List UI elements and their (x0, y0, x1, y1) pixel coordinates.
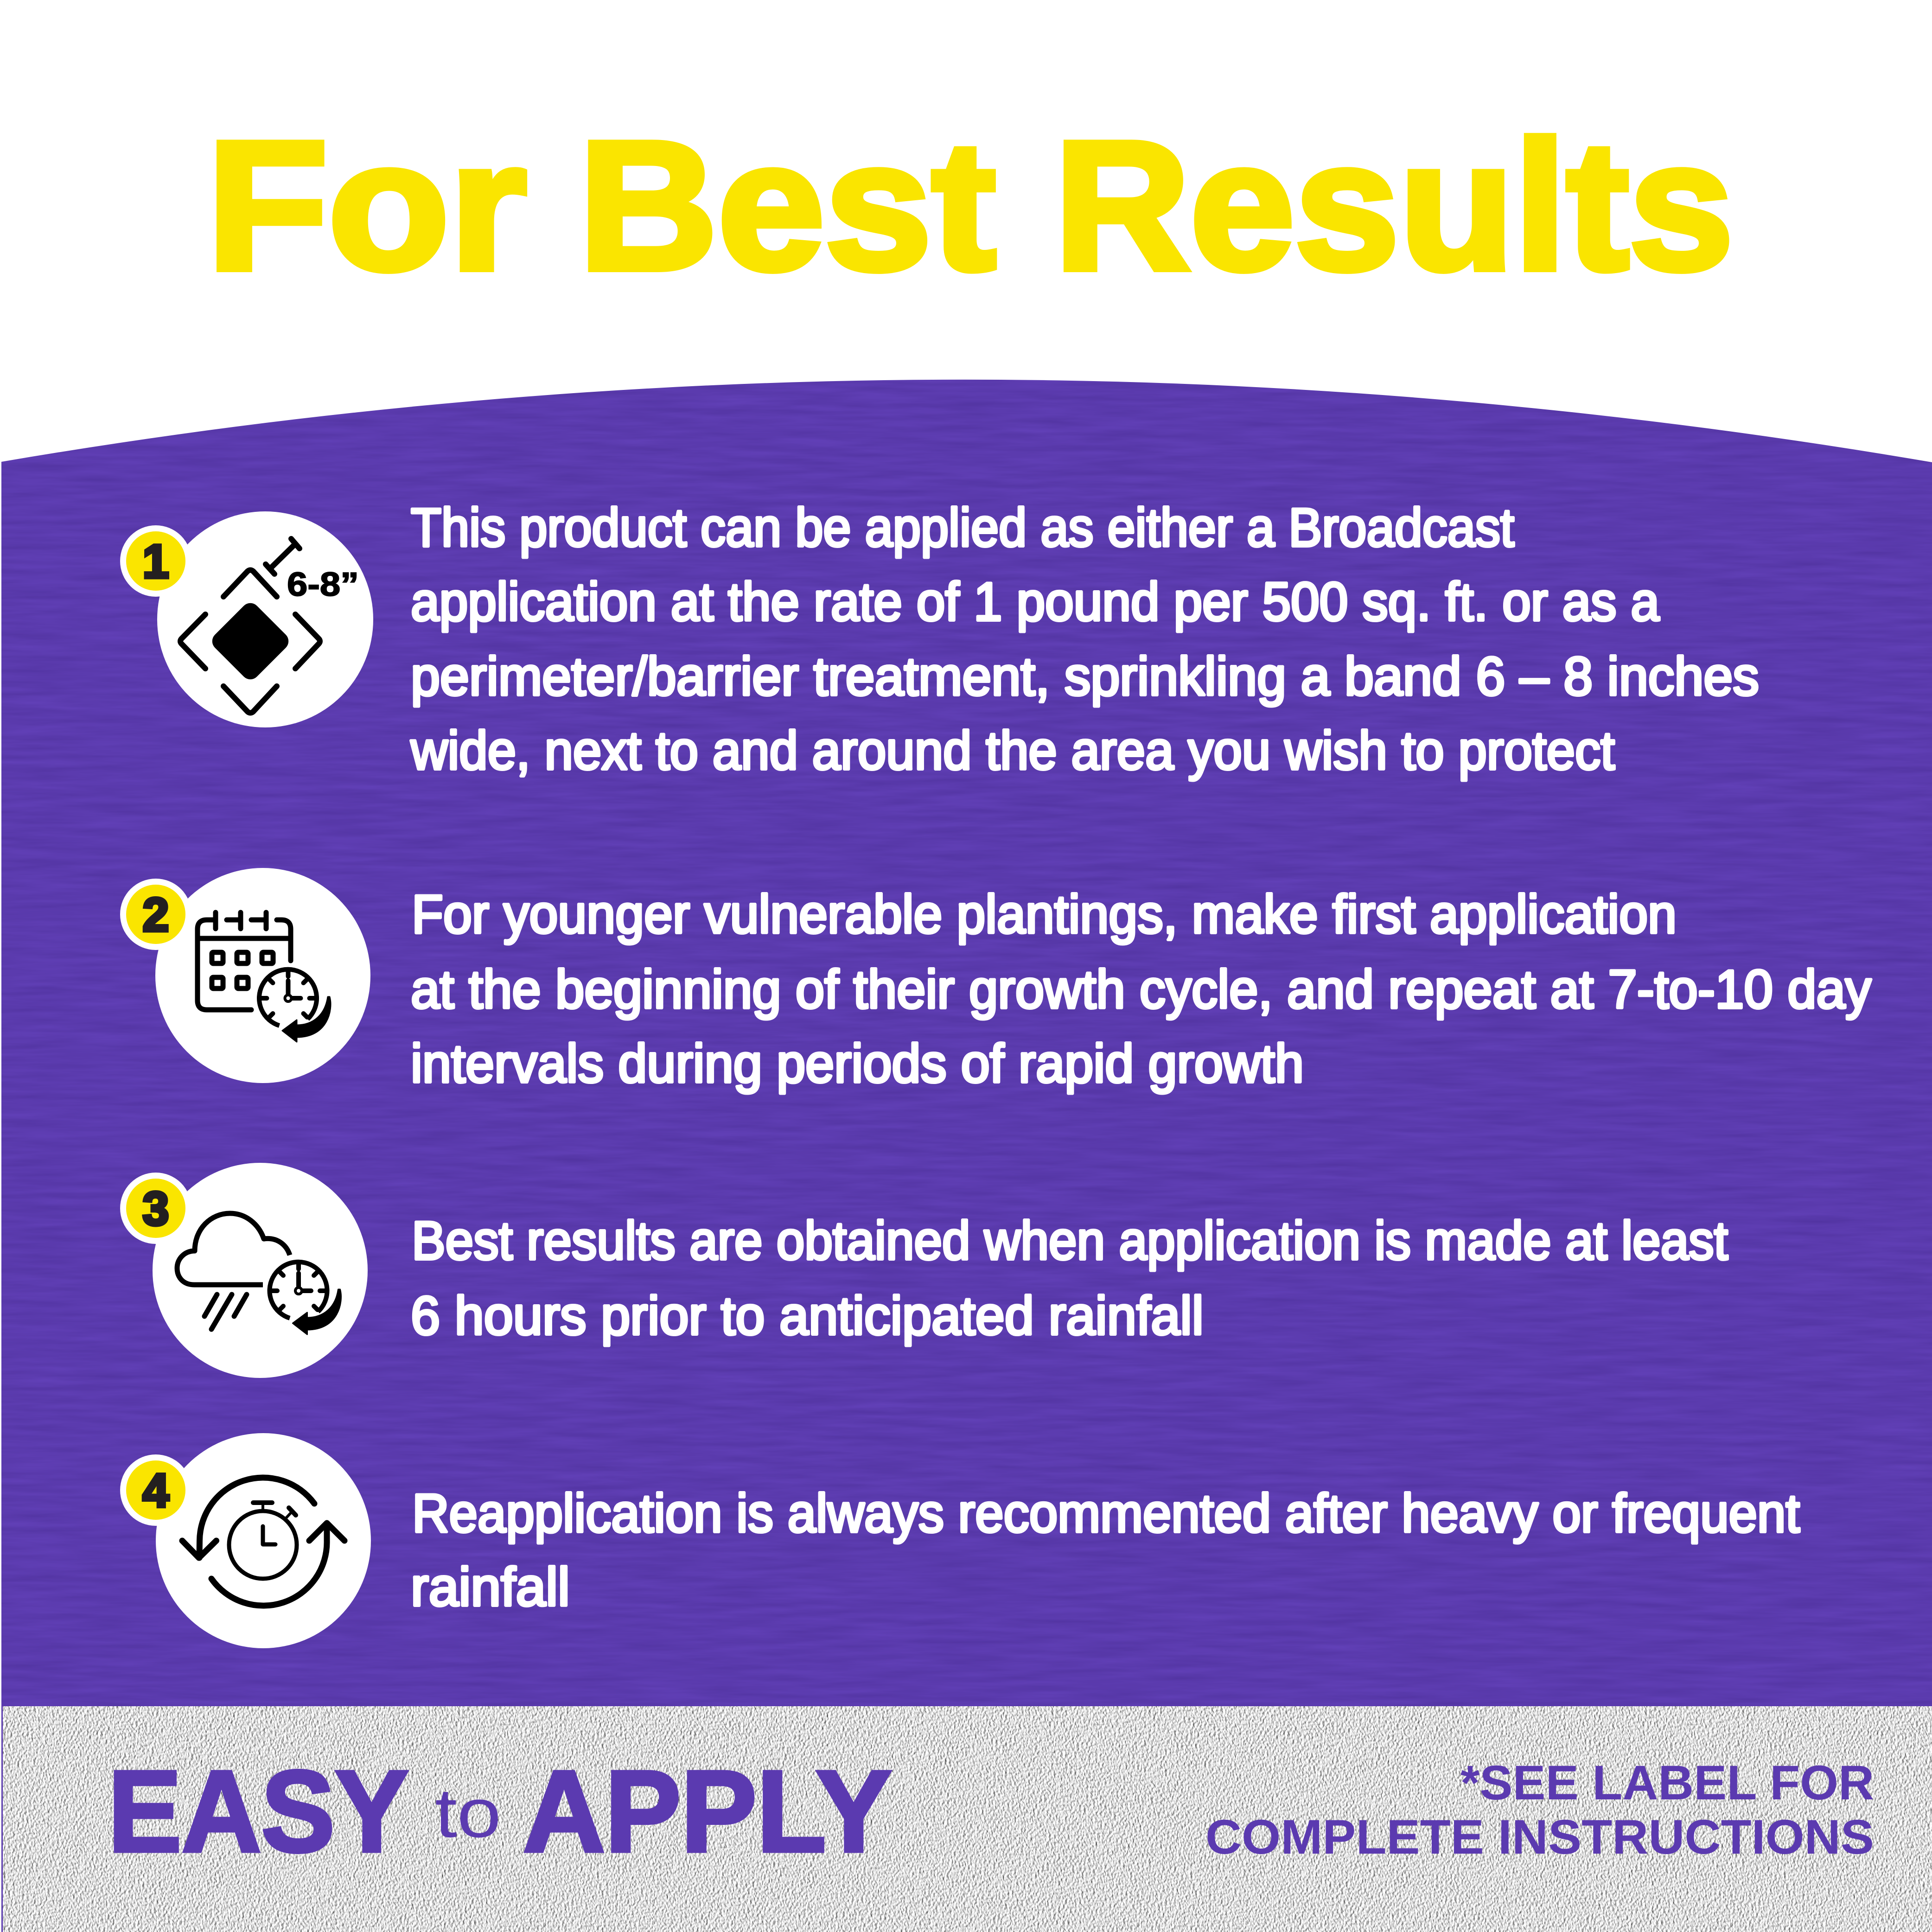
text: step 1: application at the rate of 1 pound per 500 sq. ft. or as a (411, 571, 1660, 632)
icon: calendar with clock (198, 912, 331, 1042)
text: step 2: intervals during periods of rapid growth (411, 1033, 1304, 1094)
number badge 3 (120, 1173, 191, 1244)
text: step 2: For younger vulnerable plantings, make first application (412, 884, 1677, 944)
text: step 1: wide, next to and around the area you wish to protect (410, 720, 1615, 781)
text: step 2: at the beginning of their growth cycle, and repeat at 7-to-10 day (411, 959, 1871, 1020)
icon circle 2 (155, 868, 370, 1083)
footer note: see label: *SEE LABEL FOR (1460, 1756, 1874, 1810)
step 4 (120, 1433, 1800, 1648)
text: step 3: 6 hours prior to anticipated rainfall (411, 1285, 1204, 1346)
icon: rain cloud with clock (177, 1213, 341, 1334)
title: Results (1054, 103, 1734, 308)
number badge 4: 4 (143, 1464, 169, 1517)
footer slogan: EASY to APPLY: APPLY (523, 1747, 892, 1876)
number badge 3: 3 (143, 1182, 169, 1235)
step 2 (120, 868, 1871, 1094)
number badge 2 (120, 879, 191, 950)
text: step 3: Best results are obtained when application is made at least (412, 1210, 1728, 1271)
footer slogan: EASY to APPLY: EASY (108, 1747, 408, 1876)
text: step 1 (410, 497, 1759, 781)
icon circle 4 (156, 1433, 371, 1648)
text: step 1: perimeter/barrier treatment, sprinkling a band 6 – 8 inches (411, 646, 1759, 707)
number badge 4 (120, 1454, 191, 1526)
icon: spreading band 6-8 inches (180, 539, 359, 713)
step 3 (120, 1163, 1728, 1378)
step 1 (120, 497, 1759, 781)
title (207, 103, 1734, 308)
text: step 4: rainfall (411, 1556, 570, 1617)
number badge 1: 1 (143, 535, 169, 588)
footer slogan: EASY to APPLY: to (435, 1774, 501, 1852)
icon: spreading band 6-8 inches: 6-8” (287, 566, 359, 603)
icon: stopwatch with cycle arrows (182, 1478, 344, 1606)
icon circle 1 (157, 511, 373, 727)
number badge 2: 2 (143, 888, 169, 941)
panel: grey stucco footer (3, 1706, 1932, 1932)
text: step 2 (411, 884, 1871, 1094)
title: For (207, 103, 527, 308)
text: step 4: Reapplication is always recommented after heavy or frequent (412, 1483, 1800, 1543)
footer note: see label: COMPLETE INSTRUCTIONS (1205, 1810, 1874, 1864)
text: step 3 (411, 1210, 1728, 1346)
title: Best (579, 103, 996, 308)
text: step 1: This product can be applied as either a Broadcast (411, 497, 1514, 558)
text: step 4 (411, 1483, 1800, 1617)
footer note: see label (1205, 1756, 1874, 1864)
number badge 1 (120, 525, 191, 597)
footer slogan: EASY to APPLY (108, 1747, 892, 1876)
icon circle 3 (153, 1163, 368, 1378)
